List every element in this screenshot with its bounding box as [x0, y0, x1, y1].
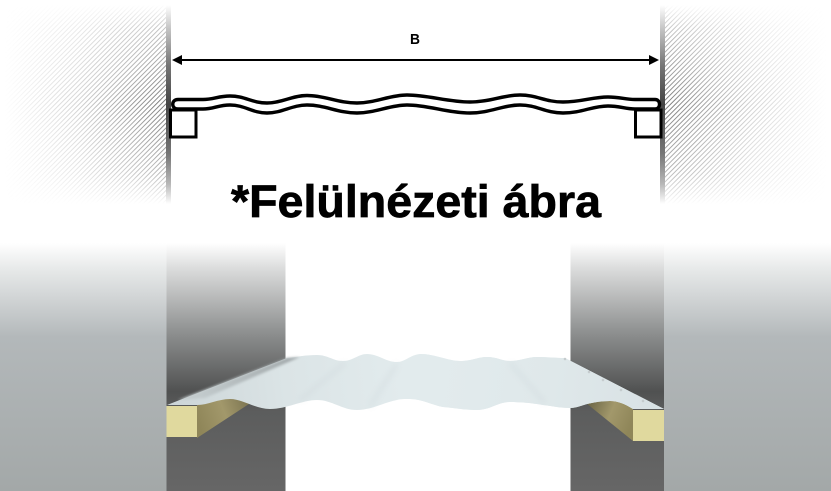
perspective: left beam — [166, 396, 252, 438]
dimension arrow B — [172, 55, 659, 65]
top view: corrugated sheet — [173, 95, 660, 113]
dimension label B: B — [410, 31, 420, 48]
wall face line, right — [660, 5, 665, 204]
perspective: right reveal — [570, 243, 664, 491]
hatched wall, right — [665, 8, 814, 200]
sheet: shaded left edge — [178, 357, 300, 400]
perspective: right outer wall — [664, 243, 831, 491]
perspective: left reveal — [166, 243, 286, 491]
hatched wall, left — [18, 8, 166, 200]
perspective: right beam — [586, 398, 664, 441]
sheet: rivets — [564, 358, 644, 402]
wall face line, left — [166, 5, 171, 204]
perspective: corrugated sheet — [167, 354, 664, 410]
perspective: left outer wall — [0, 243, 166, 491]
caption: *Felülnézeti ábra — [231, 176, 602, 227]
top view: left support beam — [170, 110, 196, 137]
top view: right support beam — [636, 110, 661, 137]
sheet: corrugation ribs — [300, 363, 545, 406]
